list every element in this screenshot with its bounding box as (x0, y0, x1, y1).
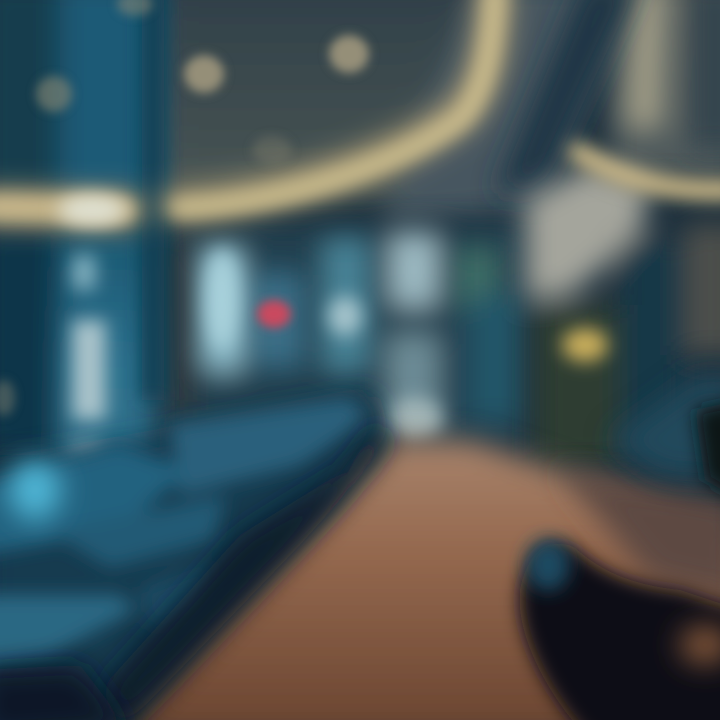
element: yellow lamp (562, 328, 608, 362)
panel: back wall and windows (160, 225, 530, 445)
element: black foreground chair (520, 543, 720, 720)
panel: wooden floor (110, 440, 720, 720)
element: curved golden ceiling light (0, 0, 495, 210)
element: upper right beige strip (625, 0, 720, 150)
panel: ceiling (0, 0, 720, 225)
element: chair blue highlight (526, 539, 570, 591)
element: right golden light (578, 152, 720, 190)
element: sofa shadow edge (100, 420, 385, 720)
panel: left column (0, 225, 155, 495)
element: floor right shade (560, 470, 720, 600)
element: curved golden ceiling light glow (0, 0, 495, 210)
element: left foreground shadow (0, 665, 130, 720)
element: column edge (142, 0, 164, 400)
panel: left blue sofas (0, 395, 380, 720)
panel: right wall (525, 165, 720, 465)
element: window glow (206, 250, 441, 438)
element: bright light core (58, 194, 126, 226)
element: red sign (257, 300, 291, 328)
element: right dark seat (695, 400, 720, 500)
panel: right blue seating (610, 375, 720, 480)
element: sofa cushions (0, 398, 368, 668)
element: column light streaks (70, 255, 106, 500)
element: floor reflection (679, 625, 720, 665)
element: bright cyan cushion (9, 460, 61, 520)
element: dark diagonal beam (495, 0, 640, 195)
icon: ceiling spot lights (0, 0, 369, 416)
